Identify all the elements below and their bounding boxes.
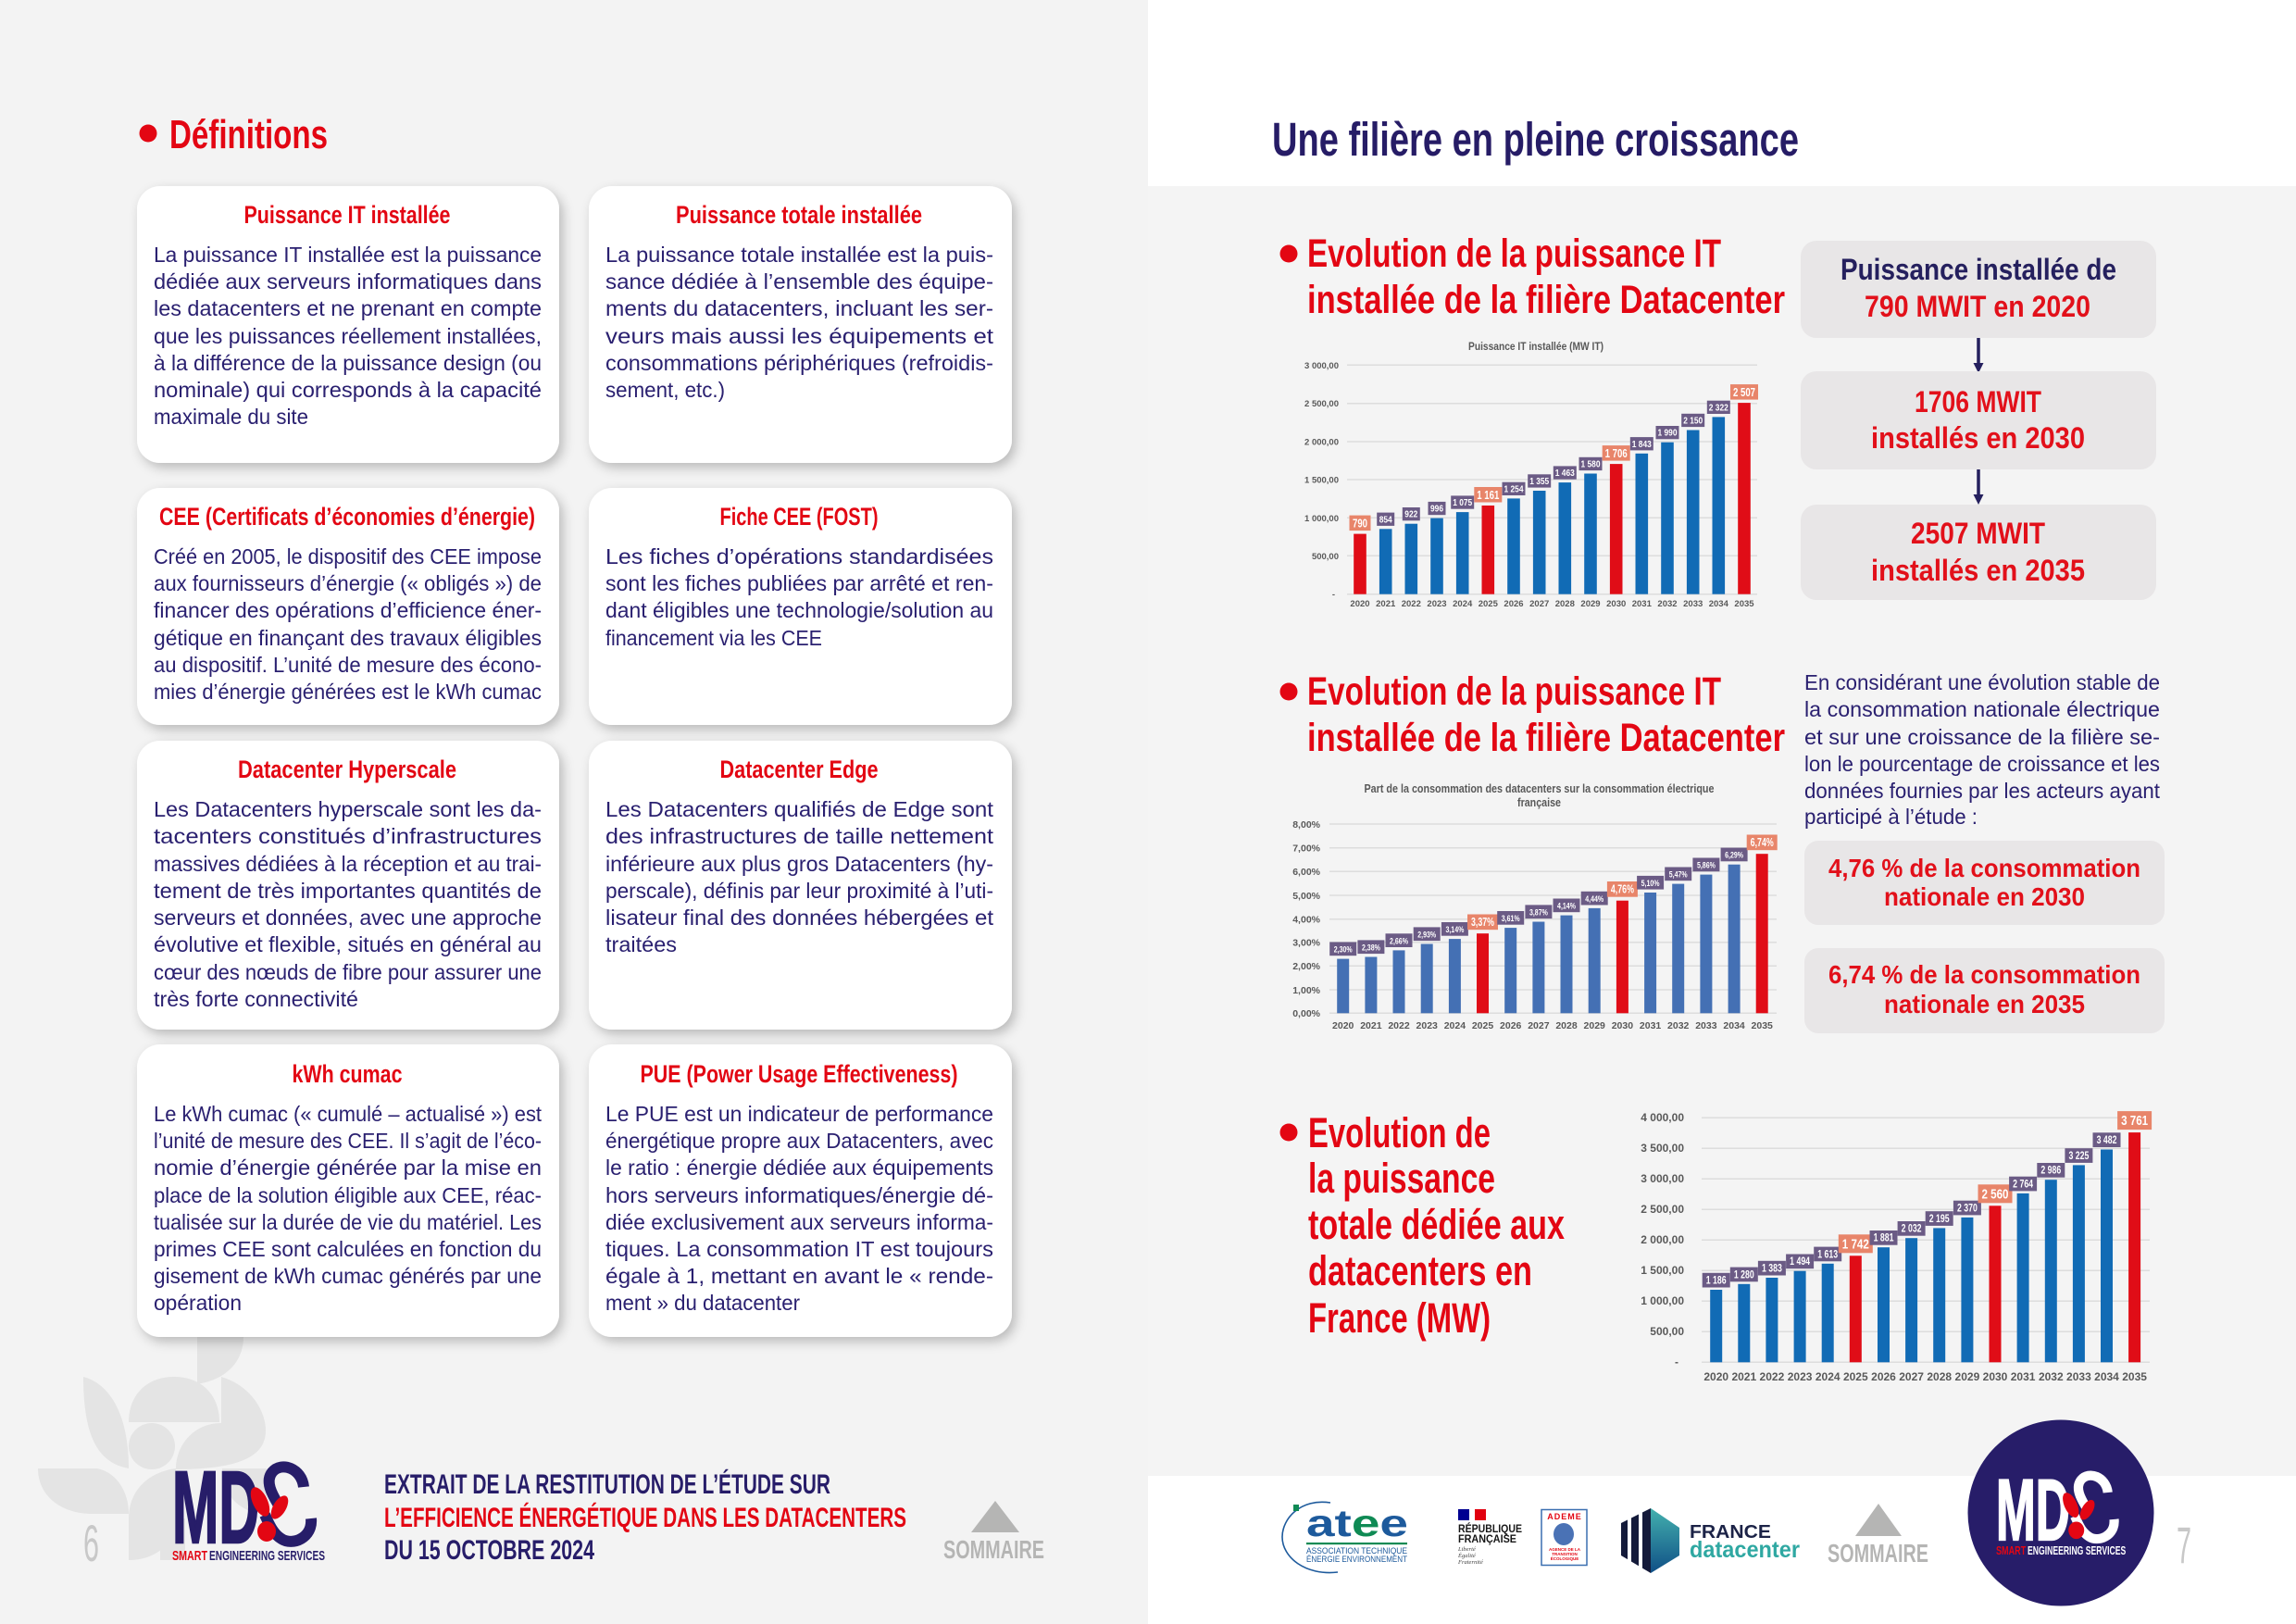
callout: Puissance installée timeline: installés en 2035	[1871, 554, 2085, 587]
chart: puissance totale: 2021	[1731, 1370, 1756, 1383]
chart: part de la consommation: 2032	[1667, 1020, 1690, 1031]
panel: CEE: mies d’énergie générées est le kWh cumac	[154, 680, 542, 704]
chart: Puissance IT installée: 790	[1353, 518, 1367, 531]
panel: kWh cumac: tualisée sur la durée de vie du matériel. Les	[154, 1210, 542, 1234]
text block: En considérant: données fournies par les acteurs ayant	[1804, 779, 2161, 803]
footer title	[384, 1468, 906, 1566]
left page background	[0, 0, 1148, 1624]
chart: puissance totale: 2031	[2011, 1370, 2036, 1383]
chart: Puissance IT installée: 2020	[1350, 599, 1370, 609]
chart: puissance totale: 2022	[1760, 1370, 1785, 1383]
chart: Puissance IT installée: 2 000,00	[1304, 437, 1339, 448]
chart: Puissance IT installée: 2 500,00	[1304, 399, 1339, 409]
panel: PUE	[589, 1044, 1012, 1337]
chart: part de la consommation: 1,00%	[1292, 985, 1321, 996]
badge: circle logo MDSC: MD	[1996, 1461, 2070, 1558]
heading: Définitions	[139, 112, 328, 157]
panel: Puissance IT installée: que les puissances réellement installées,	[154, 324, 542, 348]
chart: puissance totale: 1 881	[1874, 1233, 1894, 1244]
chart: Puissance IT installée: 2 150	[1683, 416, 1703, 426]
footer title: L’EFFICIENCE ÉNERGÉTIQUE DANS LES DATACENTERS	[384, 1502, 906, 1533]
panel: kWh cumac	[137, 1044, 559, 1337]
panel: kWh cumac: l’unité de mesure des CEE. Il s’agit de l’éco-	[154, 1129, 542, 1153]
panel: Datacenter Hyperscale: Les Datacenters hyperscale sont les da-	[154, 797, 542, 821]
panel: Fiche CEE	[589, 488, 1012, 725]
chart: puissance totale: 3 000,00	[1641, 1172, 1684, 1185]
logo: ADEME: ADEME	[1547, 1512, 1582, 1521]
panel: kWh cumac: kWh cumac	[293, 1060, 402, 1088]
chart: Puissance IT installée: 2030	[1606, 599, 1626, 609]
chart: Puissance IT installée: Puissance IT installée (MW IT)	[1468, 340, 1603, 353]
panel: kWh cumac: Le kWh cumac (« cumulé – actualisé ») est	[154, 1102, 543, 1126]
panel: Datacenter Hyperscale: serveurs et données, avec une approche	[154, 906, 542, 930]
chart: Puissance IT installée: 1 500,00	[1304, 476, 1339, 485]
chart: Puissance IT installée: 2033	[1683, 599, 1703, 609]
chart: part de la consommation: 2,00%	[1292, 961, 1321, 972]
chart: puissance totale: 2020	[1703, 1370, 1728, 1383]
text block: En considérant: lon le pourcentage de croissance et les	[1804, 752, 2160, 776]
chart: part de la consommation: 2021	[1360, 1020, 1382, 1031]
heading: evolution puissance totale	[1279, 1109, 1565, 1342]
chart: puissance totale: 3 761	[2121, 1113, 2148, 1128]
callout: 6,74 %: 6,74 % de la consommation	[1828, 960, 2140, 989]
heading: Définitions: Définitions	[169, 112, 328, 157]
panel: Puissance IT installée: les datacenters et ne prenant en compte	[154, 296, 542, 320]
chart: puissance totale: 2033	[2066, 1370, 2091, 1383]
panel: CEE: financer des opérations d’efficience éner-	[154, 598, 542, 622]
chart: part de la consommation: 0,00%	[1292, 1008, 1321, 1019]
logo: ADEME: ÉCOLOGIQUE	[1551, 1555, 1578, 1561]
panel: PUE: Le PUE est un indicateur de performance	[605, 1102, 993, 1126]
page number 7: 7	[2177, 1516, 2191, 1574]
panel: CEE: au dispositif. L’unité de mesure des écono-	[154, 653, 542, 677]
panel: Puissance totale installée: veurs mais aussi les équipements et	[605, 324, 994, 348]
chart: puissance totale: 2 000,00	[1641, 1233, 1684, 1246]
chart: part de la consommation: 6,29%	[1725, 850, 1744, 860]
logo: République française: RÉPUBLIQUE	[1458, 1523, 1522, 1535]
logo: République française: Fraternité	[1457, 1559, 1484, 1566]
logo: atee: at ee	[1306, 1502, 1408, 1544]
callout: Puissance installée timeline: Puissance installée de	[1841, 253, 2116, 286]
panel: Puissance totale installée: Puissance totale installée	[676, 201, 922, 229]
panel: Datacenter Edge: Datacenter Edge	[720, 756, 878, 783]
chart: part de la consommation: 2033	[1695, 1020, 1717, 1031]
logo: République française: FRANÇAISE	[1458, 1534, 1516, 1545]
callout: Puissance installée timeline: 2507 MWIT	[1911, 517, 2045, 550]
panel: PUE: diée exclusivement aux serveurs informa-	[605, 1210, 993, 1234]
chart: Puissance IT installée: 922	[1404, 509, 1417, 519]
text block: En considérant: et sur une croissance de la filière se-	[1804, 725, 2160, 749]
panel: Puissance totale installée	[589, 186, 1012, 463]
chart: puissance totale: 3 482	[2097, 1135, 2117, 1146]
chart: part de la consommation: 3,00%	[1292, 937, 1321, 948]
chart: part de la consommation: 4,00%	[1292, 915, 1321, 926]
chart: puissance totale: 2032	[2039, 1370, 2064, 1383]
panel: PUE: tiques. La consommation IT est toujours	[605, 1237, 993, 1261]
chart: puissance totale: -	[1675, 1355, 1678, 1368]
logo: France datacenter: FRANCE	[1690, 1522, 1771, 1543]
chart: puissance totale: 3 225	[2068, 1151, 2090, 1162]
panel: PUE: ment » du datacenter	[605, 1291, 800, 1315]
right page band	[1148, 186, 2296, 1476]
panel: PUE: égale à 1, mettant en avant le « rende-	[605, 1264, 993, 1288]
chart: part de la consommation: 3,87%	[1529, 906, 1548, 918]
panel: Datacenter Edge: inférieure aux plus gros Datacenters (hy-	[605, 852, 993, 876]
chart: part de la consommation: 5,10%	[1641, 878, 1660, 888]
logo: atee: ASSOCIATION TECHNIQUE	[1306, 1546, 1407, 1556]
chart: Puissance IT installée: 1 580	[1581, 459, 1600, 469]
chart: puissance totale: 2 195	[1929, 1214, 1950, 1225]
panel: Datacenter Hyperscale: Datacenter Hyperscale	[238, 756, 456, 783]
heading: evolution puissance IT 1	[1279, 231, 1785, 322]
chart: part de la consommation: 4,76%	[1611, 883, 1634, 896]
chart: part de la consommation: 2035	[1752, 1020, 1773, 1031]
heading: evolution puissance IT 1: Evolution de la puissance IT	[1307, 231, 1721, 276]
chart: puissance totale	[1641, 1111, 2152, 1383]
text block: En considérant: En considérant une évolution stable de	[1804, 670, 2160, 694]
chart: puissance totale: 1 000,00	[1641, 1294, 1684, 1307]
chart: part de la consommation: 3,37%	[1471, 917, 1494, 930]
chart: part de la consommation: 5,86%	[1697, 860, 1716, 870]
chart: puissance totale: 1 383	[1762, 1263, 1782, 1275]
chart: puissance totale: 2030	[1983, 1370, 2008, 1383]
chart: puissance totale: 1 613	[1817, 1249, 1838, 1261]
panel: Fiche CEE: Les fiches d’opérations standardisées	[605, 544, 993, 568]
chart: Puissance IT installée: 3 000,00	[1304, 361, 1339, 371]
icon: sommaire right: SOMMAIRE	[1828, 1539, 1928, 1568]
heading: evolution puissance totale: totale dédiée aux	[1308, 1201, 1565, 1248]
chart: part de la consommation: 4,44%	[1585, 893, 1604, 904]
chart: Puissance IT installée: 2027	[1529, 599, 1549, 609]
badge: circle logo MDSC: ENGINEERING SERVICES	[2028, 1543, 2126, 1557]
chart: part de la consommation: 2022	[1388, 1020, 1410, 1031]
panel: Datacenter Hyperscale	[137, 741, 559, 1030]
logo: République française	[1457, 1509, 1522, 1566]
chart: Puissance IT installée: 500,00	[1312, 552, 1339, 562]
chart: puissance totale: 1 186	[1706, 1275, 1727, 1287]
chart: part de la consommation: 5,47%	[1669, 869, 1688, 880]
chart: puissance totale: 2034	[2094, 1370, 2119, 1383]
chart: part de la consommation: française	[1517, 796, 1561, 809]
chart: Puissance IT installée: 2022	[1402, 599, 1421, 609]
panel: Datacenter Hyperscale: tacenters constitués d’infrastructures	[154, 824, 542, 848]
chart: puissance totale: 2 986	[2040, 1166, 2061, 1177]
panel: Fiche CEE: Fiche CEE (FOST)	[720, 503, 878, 531]
callout: Puissance installée timeline: 1706 MWIT	[1915, 385, 2041, 418]
panel: PUE: le ratio : énergie dédiée aux équipements	[605, 1156, 993, 1180]
logo: atee: ÉNERGIE ENVIRONNEMENT	[1306, 1555, 1407, 1565]
callout: Puissance installée timeline: 790 MWIT en 2020	[1865, 290, 2090, 323]
heading: evolution puissance IT 2: installée de la filière Datacenter	[1307, 716, 1785, 760]
panel: CEE: aux fournisseurs d’énergie (« obligés ») de	[154, 571, 542, 595]
chart: Puissance IT installée: 2035	[1734, 599, 1754, 609]
panel: PUE: PUE (Power Usage Effectiveness)	[641, 1060, 957, 1088]
panel: Fiche CEE: sont les fiches publiées par arrêté et ren-	[605, 571, 993, 595]
chart: Puissance IT installée: 2021	[1376, 599, 1396, 609]
logo: MDSC: MD	[172, 1451, 259, 1565]
logo: MDSC: ENGINEERING SERVICES	[209, 1548, 325, 1564]
panel: Datacenter Edge	[589, 741, 1012, 1030]
panel: Datacenter Edge: lisateur final des données hébergées et	[605, 906, 994, 930]
logo: France datacenter: datacenter	[1690, 1537, 1800, 1563]
logo: MDSC: SMART	[172, 1548, 207, 1564]
callout: 6,74 %: nationale en 2035	[1884, 990, 2085, 1018]
chart: puissance totale: 1 280	[1734, 1269, 1754, 1281]
heading: evolution puissance totale: la puissance	[1308, 1155, 1495, 1202]
chart: puissance totale: 3 500,00	[1641, 1142, 1684, 1155]
chart: part de la consommation: 2,93%	[1417, 929, 1437, 940]
chart: puissance totale: 1 494	[1790, 1256, 1810, 1268]
panel: Puissance totale installée: sement, etc.)	[605, 378, 725, 402]
chart: Puissance IT installée: 1 161	[1477, 490, 1500, 502]
chart: Puissance IT installée: 2 507	[1733, 387, 1755, 400]
panel: kWh cumac: place de la solution éligible aux CEE, réac-	[154, 1183, 542, 1207]
text block: En considérant	[1804, 670, 2161, 829]
panel: Datacenter Edge: des infrastructures de taille nettement	[605, 824, 994, 848]
chart: puissance totale: 2 764	[2013, 1179, 2033, 1191]
panel: Datacenter Edge: traitées	[605, 932, 677, 956]
panel: Puissance IT installée	[137, 186, 559, 463]
callout: 6,74 %	[1804, 948, 2165, 1033]
chart: part de la consommation: Part de la consommation des datacenters sur la consommation électrique	[1365, 782, 1715, 795]
icon: sommaire right	[1828, 1504, 1928, 1568]
page number 6: 6	[83, 1514, 99, 1572]
heading: evolution puissance IT 2	[1279, 669, 1785, 760]
chart: puissance totale: 2024	[1816, 1370, 1841, 1383]
decorative leaf pattern	[38, 1337, 267, 1560]
panel: Datacenter Hyperscale: très forte connectivité	[154, 987, 358, 1011]
title: Une filière en pleine croissance: Une filière en pleine croissance	[1272, 113, 1799, 166]
chart: part de la consommation: 2,30%	[1334, 944, 1353, 955]
chart: Puissance IT installée: 996	[1430, 504, 1443, 514]
footer title: DU 15 OCTOBRE 2024	[384, 1535, 594, 1566]
chart: puissance totale: 2028	[1927, 1370, 1952, 1383]
chart: part de la consommation: 2028	[1555, 1020, 1578, 1031]
panel: Puissance totale installée: La puissance totale installée est la puis-	[605, 243, 993, 267]
chart: part de la consommation: 2,66%	[1390, 935, 1408, 946]
panel: Puissance IT installée: dédiée aux serveurs informatiques dans	[154, 269, 542, 294]
chart: Puissance IT installée: 1 990	[1658, 428, 1677, 438]
panel: Puissance totale installée: consommations périphériques (refroidis-	[605, 351, 993, 375]
heading: evolution puissance totale: Evolution de	[1308, 1109, 1491, 1156]
panel: CEE: Créé en 2005, le dispositif des CEE impose	[154, 544, 542, 568]
chart: Puissance IT installée: 2032	[1657, 599, 1678, 609]
callout: 4,76 %: nationale en 2030	[1884, 882, 2085, 911]
panel: CEE: CEE (Certificats d’économies d’énergie)	[159, 503, 535, 531]
chart: part de la consommation: 2026	[1500, 1020, 1522, 1031]
chart: Puissance IT installée: 1 706	[1605, 448, 1628, 461]
chart: Puissance IT installée: -	[1332, 590, 1335, 600]
chart: part de la consommation: 2027	[1528, 1020, 1550, 1031]
chart: puissance totale: 500,00	[1650, 1325, 1684, 1338]
panel: Fiche CEE: dant éligibles une technologie/solution au	[605, 598, 993, 622]
text block: En considérant: participé à l’étude :	[1804, 805, 1978, 829]
chart: part de la consommation: 6,00%	[1292, 867, 1321, 878]
panel: Puissance IT installée: à la différence de la puissance design (ou	[154, 351, 542, 375]
chart: puissance totale: 2 560	[1981, 1186, 2009, 1202]
chart: Puissance IT installée: 1 000,00	[1304, 514, 1339, 524]
footer title: EXTRAIT DE LA RESTITUTION DE L’ÉTUDE SUR	[384, 1468, 830, 1500]
chart: puissance totale: 1 500,00	[1641, 1264, 1684, 1277]
chart: Puissance IT installée: 854	[1379, 515, 1392, 524]
logo: ADEME: TRANSITION	[1552, 1552, 1578, 1556]
chart: Puissance IT installée: 1 355	[1529, 476, 1549, 486]
panel: PUE: hors serveurs informatiques/énergie dé-	[605, 1183, 993, 1207]
chart: part de la consommation: 3,61%	[1502, 913, 1520, 923]
chart: part de la consommation	[1292, 782, 1778, 1031]
panel: Datacenter Hyperscale: cœur des nœuds de fibre pour assurer une	[154, 960, 542, 984]
chart: part de la consommation: 2034	[1723, 1020, 1745, 1031]
chart: Puissance IT installée: 1 254	[1504, 484, 1524, 494]
chart: puissance totale: 2023	[1788, 1370, 1813, 1383]
panel: CEE	[137, 488, 559, 725]
chart: part de la consommation: 6,74%	[1751, 837, 1774, 850]
logo: ADEME: AGENCE DE LA	[1549, 1547, 1581, 1552]
chart: Puissance IT installée: 2023	[1427, 599, 1447, 609]
panel: kWh cumac: opération	[154, 1291, 242, 1315]
heading: evolution puissance totale: datacenters en	[1308, 1247, 1532, 1294]
chart: part de la consommation: 4,14%	[1557, 901, 1576, 911]
chart: Puissance IT installée: 2031	[1632, 599, 1653, 609]
panel: kWh cumac: nomie d’énergie générée par la mise en	[154, 1156, 542, 1180]
chart: part de la consommation: 3,14%	[1445, 924, 1465, 934]
icon: sommaire left	[943, 1501, 1044, 1564]
panel: Puissance IT installée: maximale du site	[154, 405, 308, 429]
chart: Puissance IT installée: 1 463	[1555, 468, 1575, 478]
heading: evolution puissance totale: France (MW)	[1308, 1294, 1491, 1342]
chart: Puissance IT installée: 2 322	[1709, 403, 1728, 413]
chart: Puissance IT installée: 2024	[1453, 599, 1473, 609]
heading: evolution puissance IT 1: installée de la filière Datacenter	[1307, 278, 1785, 322]
badge: circle logo MDSC	[1968, 1420, 2153, 1605]
heading: evolution puissance IT 2: Evolution de la puissance IT	[1307, 669, 1721, 714]
panel: Datacenter Edge: Les Datacenters qualifiés de Edge sont	[605, 797, 994, 821]
panel: Fiche CEE: financement via les CEE	[605, 626, 822, 650]
chart: part de la consommation: 2030	[1612, 1020, 1633, 1031]
chart: Puissance IT installée: 1 075	[1453, 497, 1472, 507]
chart: part de la consommation: 2024	[1444, 1020, 1466, 1031]
callout: 4,76 %: 4,76 % de la consommation	[1828, 854, 2140, 882]
chart: Puissance IT installée: 1 843	[1632, 439, 1652, 449]
chart: puissance totale: 2035	[2122, 1370, 2147, 1383]
chart: Puissance IT installée: 2028	[1555, 599, 1575, 609]
panel: Puissance totale installée: sance dédiée à l’ensemble des équipe-	[605, 269, 993, 294]
callout: 4,76 %	[1804, 841, 2165, 925]
logo: atee	[1282, 1502, 1408, 1573]
text block: En considérant: la consommation nationale électrique	[1804, 697, 2160, 721]
panel: PUE: énergétique propre aux Datacenters, avec	[605, 1129, 993, 1153]
logo: République française: Liberté	[1457, 1546, 1477, 1553]
panel: CEE: gétique en finançant des travaux éligibles	[154, 626, 542, 650]
panel: Datacenter Edge: perscale), définis par leur proximité à l’uti-	[605, 879, 993, 903]
chart: Puissance IT installée: 2029	[1580, 599, 1601, 609]
chart: part de la consommation: 2025	[1472, 1020, 1493, 1031]
panel: Datacenter Hyperscale: massives dédiées à la réception et au trai-	[154, 852, 542, 876]
chart: puissance totale: 2027	[1899, 1370, 1924, 1383]
logo: France datacenter	[1621, 1508, 1800, 1573]
callout: Puissance installée timeline	[1801, 241, 2156, 600]
callout: Puissance installée timeline: installés en 2030	[1871, 421, 2085, 455]
logo: ADEME	[1541, 1509, 1587, 1565]
chart: puissance totale: 2 370	[1957, 1203, 1978, 1215]
chart: part de la consommation: 2023	[1416, 1020, 1438, 1031]
chart: Puissance IT installée: 2026	[1504, 599, 1524, 609]
chart: part de la consommation: 7,00%	[1292, 843, 1321, 854]
logo: République française: Égalité	[1457, 1552, 1477, 1559]
badge: circle logo MDSC: SMART	[1996, 1543, 2026, 1557]
chart: puissance totale: 1 742	[1842, 1236, 1869, 1252]
panel: Puissance IT installée: La puissance IT installée est la puissance	[154, 243, 542, 267]
panel: Datacenter Hyperscale: évolutive et flexible, situés en général au	[154, 932, 542, 956]
chart: part de la consommation: 2031	[1640, 1020, 1661, 1031]
chart: puissance totale: 4 000,00	[1641, 1111, 1684, 1124]
panel: kWh cumac: gisement de kWh cumac générés par une	[154, 1264, 542, 1288]
chart: part de la consommation: 2020	[1332, 1020, 1354, 1031]
chart: part de la consommation: 5,00%	[1292, 891, 1321, 902]
chart: part de la consommation: 2,38%	[1362, 942, 1380, 953]
chart: part de la consommation: 8,00%	[1292, 819, 1321, 831]
panel: Puissance totale installée: ments du datacenters, incluant les ser-	[605, 296, 993, 320]
chart: puissance totale: 2026	[1871, 1370, 1896, 1383]
panel: Puissance IT installée: nominale) qui corresponds à la capacité	[154, 378, 542, 402]
panel: Puissance IT installée: Puissance IT installée	[244, 201, 450, 229]
chart: Puissance IT installée	[1304, 340, 1758, 609]
chart: part de la consommation: 2029	[1584, 1020, 1605, 1031]
chart: puissance totale: 2 500,00	[1641, 1203, 1684, 1216]
panel: Datacenter Hyperscale: tement de très importantes quantités de	[154, 879, 542, 903]
icon: sommaire left: SOMMAIRE	[943, 1535, 1044, 1564]
chart: puissance totale: 2 032	[1902, 1224, 1922, 1235]
chart: puissance totale: 2029	[1955, 1370, 1980, 1383]
panel: kWh cumac: primes CEE sont calculées en fonction du	[154, 1237, 542, 1261]
chart: puissance totale: 2025	[1843, 1370, 1868, 1383]
chart: Puissance IT installée: 2025	[1479, 599, 1499, 609]
chart: Puissance IT installée: 2034	[1709, 599, 1729, 609]
